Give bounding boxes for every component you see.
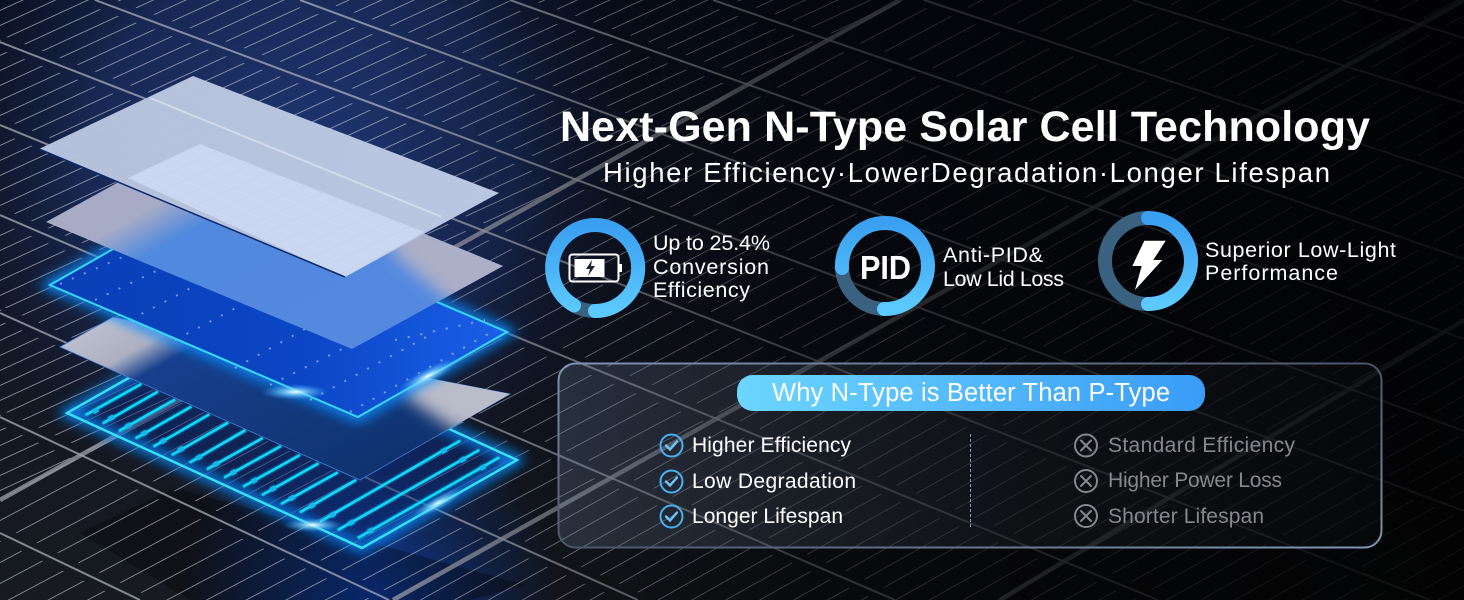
list: P-Type drawbacks (1075, 434, 1296, 528)
text: conversion efficiency: Efficiency (653, 278, 750, 302)
item: higher efficiency: Higher Efficiency (692, 434, 852, 457)
layer 4: grey film with dark blue centre (60, 317, 540, 480)
text: conversion efficiency (653, 231, 770, 302)
title: Next-Gen N-Type Solar Cell Technology (560, 103, 1370, 151)
feature: anti-PID (842, 223, 1064, 309)
item: standard efficiency: Standard Efficiency (1108, 434, 1296, 457)
text: anti-PID (943, 243, 1064, 291)
icon: battery ring (552, 225, 638, 311)
heading pill (737, 375, 1205, 411)
item: shorter lifespan: Shorter Lifespan (1108, 505, 1264, 528)
layer 5: glowing conductor grid (67, 325, 517, 548)
text: low-light performance: Performance (1205, 261, 1338, 285)
panel: N-Type vs P-Type comparison (558, 364, 1382, 548)
icon: PID ring: PID (860, 249, 911, 286)
feature: low-light performance (1105, 218, 1396, 304)
subtitle: Higher Efficiency·LowerDegradation·Longer Lifespan (603, 157, 1330, 188)
item: low degradation: Low Degradation (692, 470, 856, 493)
solar cell layer stack (39, 76, 540, 548)
heading pill: Why N-Type is Better Than P-Type (772, 379, 1170, 407)
layer 2: grey and blue film (46, 182, 503, 349)
icon: PID ring (842, 223, 928, 309)
text: low-light performance: Superior Low-Light (1205, 238, 1396, 262)
text: anti-PID: Anti-PID& (943, 243, 1043, 267)
text: conversion efficiency: Up to 25.4% (653, 231, 770, 255)
light flares (261, 353, 468, 532)
layer 1: translucent top glass (39, 76, 499, 277)
icon: lightning ring (1105, 218, 1191, 304)
list: N-Type benefits (660, 434, 856, 528)
text: low-light performance (1205, 238, 1396, 285)
item: longer lifespan: Longer Lifespan (692, 505, 843, 528)
text: conversion efficiency: Conversion (653, 255, 769, 279)
layer 3: glowing blue cell sheet (50, 200, 507, 417)
text: anti-PID: Low Lid Loss (943, 267, 1064, 291)
item: higher power loss: Higher Power Loss (1108, 469, 1282, 492)
feature: conversion efficiency (552, 225, 770, 311)
